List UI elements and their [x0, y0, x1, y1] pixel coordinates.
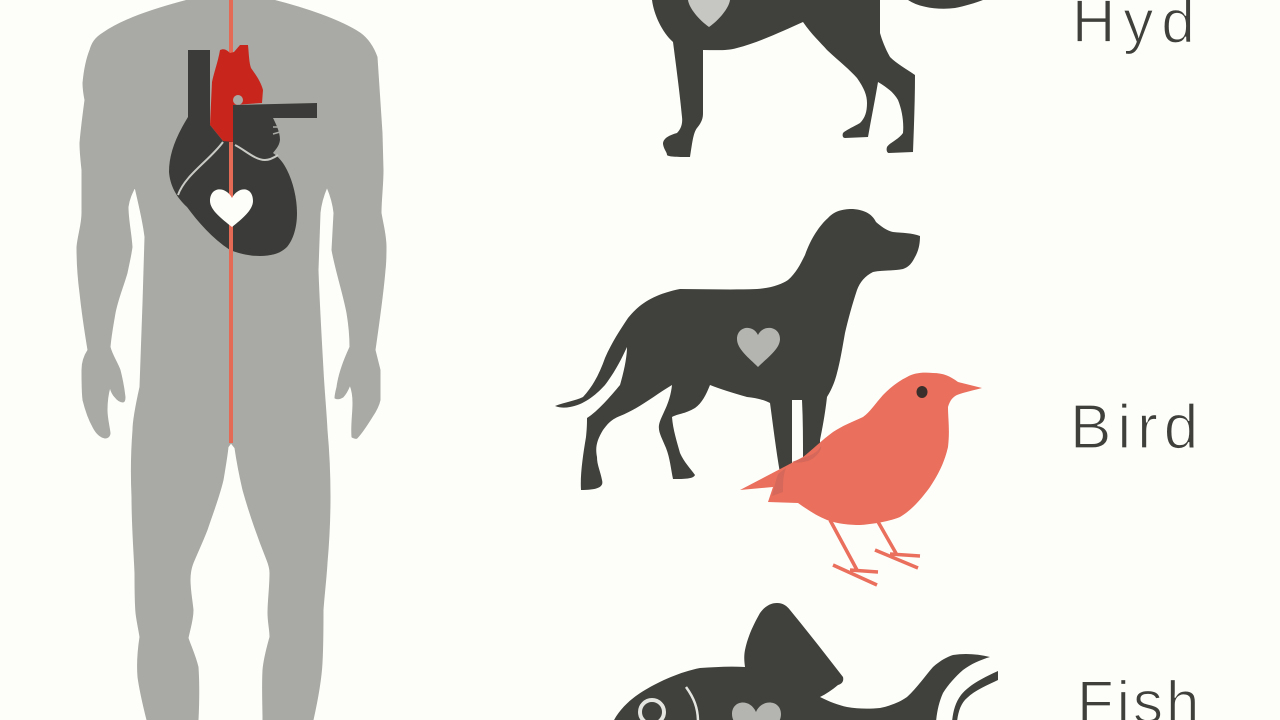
heart icon on dog	[688, 0, 730, 27]
fish gill line	[686, 687, 698, 720]
fish tail lower curve	[952, 671, 998, 720]
bird body	[740, 373, 982, 525]
bird eye	[916, 386, 928, 398]
fish (cropped)	[613, 603, 998, 720]
middle dog	[555, 209, 920, 490]
fish silhouette	[613, 603, 990, 720]
red aorta	[210, 45, 263, 143]
heart vessel notches	[273, 127, 282, 134]
central red artery line	[229, 0, 233, 443]
dark heart silhouette	[169, 50, 317, 256]
dog silhouette	[555, 209, 920, 490]
bird legs and feet	[830, 520, 920, 585]
heart icon on dog	[737, 328, 780, 367]
heart icon on fish	[732, 702, 781, 720]
aorta gap	[233, 95, 243, 105]
label: Bird: Bird	[1070, 393, 1204, 462]
top dog (cropped)	[652, 0, 983, 157]
dog paw shadow seen through bird	[772, 446, 821, 496]
fish eye ring	[640, 700, 664, 720]
bird	[740, 373, 982, 585]
artery line over heart	[229, 142, 233, 257]
human body silhouette	[77, 0, 386, 720]
anatomical heart	[169, 45, 317, 257]
human figure with heart	[77, 0, 386, 720]
white heart icon	[210, 189, 253, 227]
dog silhouette	[652, 0, 983, 157]
heart vessel lines	[178, 142, 278, 195]
